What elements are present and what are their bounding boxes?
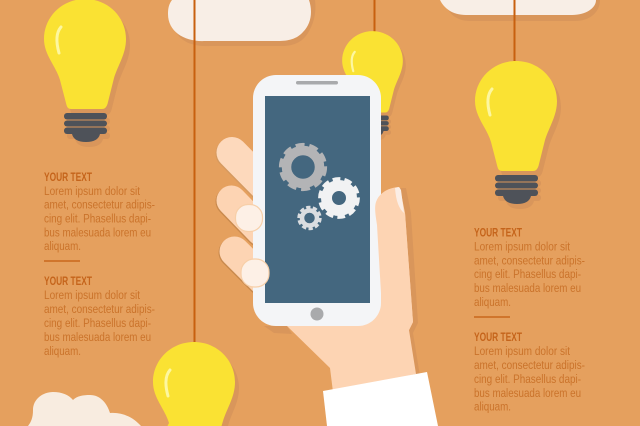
text block: left upper: amet, consectetur adipis- xyxy=(44,198,155,212)
thumb over phone xyxy=(375,187,413,330)
text block: left upper: bus malesuada lorem eu xyxy=(44,226,151,240)
cord: right bulb xyxy=(514,0,516,63)
text block: right lower: cing elit. Phasellus dapi- xyxy=(474,372,581,386)
nail: middle finger xyxy=(236,204,262,232)
text block: right upper xyxy=(474,226,585,309)
text block: right upper: YOUR TEXT xyxy=(474,226,522,240)
text block: left lower xyxy=(44,274,155,358)
cord: small bulb xyxy=(374,0,376,33)
smartphone xyxy=(253,75,381,326)
light bulb: bottom xyxy=(153,342,239,426)
cloud: bottom left xyxy=(28,392,141,426)
text block: right upper: aliquam. xyxy=(474,295,511,309)
light bulb: right xyxy=(475,61,561,209)
finger: middle xyxy=(230,200,261,232)
text block: left upper xyxy=(44,170,155,253)
home button xyxy=(310,308,324,320)
light bulb: small behind phone xyxy=(342,31,406,141)
text block: left lower: aliquam. xyxy=(44,344,81,358)
text block: left lower: bus malesuada lorem eu xyxy=(44,330,151,344)
text block: right lower: aliquam. xyxy=(474,400,511,414)
text block: right upper: amet, consectetur adipis- xyxy=(474,254,585,268)
text block: left lower: amet, consectetur adipis- xyxy=(44,302,155,316)
light bulb: top left xyxy=(44,0,130,147)
thumbnail xyxy=(395,187,404,213)
cloud: top right xyxy=(440,0,600,21)
text block: right lower: YOUR TEXT xyxy=(474,330,522,344)
hand: palm xyxy=(264,188,420,392)
gear: large grey xyxy=(281,145,325,189)
text block: right lower: Lorem ipsum dolor sit xyxy=(474,344,570,358)
text block: left upper: Lorem ipsum dolor sit xyxy=(44,184,140,198)
text block: right lower: amet, consectetur adipis- xyxy=(474,358,585,372)
text block: left lower: cing elit. Phasellus dapi- xyxy=(44,316,151,330)
text block: right upper: bus malesuada lorem eu xyxy=(474,281,581,295)
text block: right upper: cing elit. Phasellus dapi- xyxy=(474,267,581,281)
speaker xyxy=(296,81,338,84)
text block: right lower: bus malesuada lorem eu xyxy=(474,386,581,400)
nail: ring finger xyxy=(241,259,269,287)
gear: medium white xyxy=(320,179,358,217)
shirt cuff xyxy=(323,372,438,426)
text block: right lower xyxy=(474,330,585,414)
cord: long xyxy=(194,0,196,344)
text block: left upper: YOUR TEXT xyxy=(44,170,92,184)
finger: index xyxy=(231,152,265,187)
text block: left upper: cing elit. Phasellus dapi- xyxy=(44,212,151,226)
text block: left upper: aliquam. xyxy=(44,239,81,253)
finger: ring xyxy=(234,252,263,281)
text block: left lower: Lorem ipsum dolor sit xyxy=(44,288,140,302)
text block: left lower: YOUR TEXT xyxy=(44,274,92,288)
text block: right upper: Lorem ipsum dolor sit xyxy=(474,240,570,254)
gear: small xyxy=(299,207,320,229)
screen xyxy=(265,96,370,303)
cloud: top centre xyxy=(168,0,315,46)
